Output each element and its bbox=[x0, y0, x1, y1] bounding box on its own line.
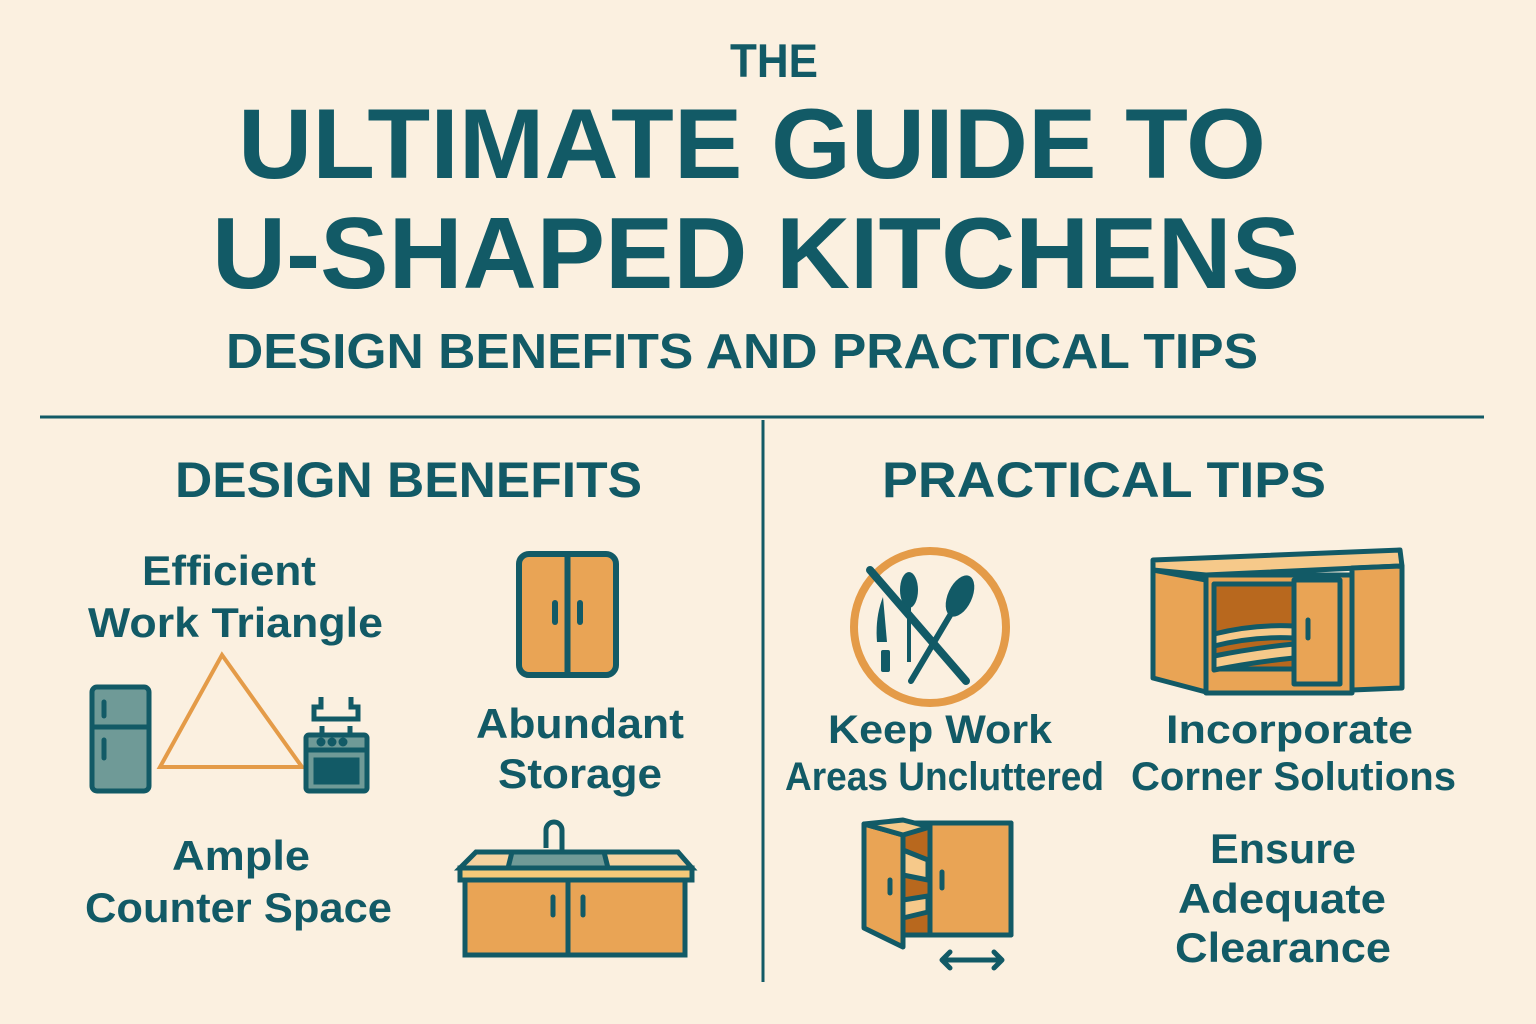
icon: storage cabinet bbox=[519, 554, 616, 675]
text: efficient work triangle: Work Triangle bbox=[88, 599, 383, 646]
text: abundant storage: Storage bbox=[498, 750, 662, 797]
heading: practical tips: PRACTICAL TIPS bbox=[882, 452, 1326, 508]
text: abundant storage: Abundant bbox=[476, 700, 684, 747]
text: abundant storage bbox=[476, 700, 684, 797]
text: ensure adequate clearance: Ensure bbox=[1210, 825, 1356, 872]
icon: triangle bbox=[160, 655, 302, 767]
panel: practical tips bbox=[785, 452, 1456, 971]
text: incorporate corner solutions: Incorporate bbox=[1166, 708, 1413, 752]
text: ample counter space: Counter Space bbox=[85, 884, 392, 931]
text: incorporate corner solutions: Corner Solutions bbox=[1131, 755, 1456, 799]
text: efficient work triangle bbox=[88, 547, 383, 646]
icon: stove bbox=[306, 697, 367, 791]
title bbox=[212, 34, 1300, 310]
text: ensure adequate clearance: Adequate bbox=[1178, 875, 1386, 922]
icon: no clutter bbox=[854, 551, 1006, 703]
text: keep work areas uncluttered bbox=[785, 708, 1104, 799]
text: keep work areas uncluttered: Areas Uncluttered bbox=[785, 755, 1104, 799]
text: ensure adequate clearance: Clearance bbox=[1175, 924, 1391, 971]
text: ample counter space bbox=[85, 832, 392, 931]
icon: fridge bbox=[92, 687, 149, 791]
text: ample counter space: Ample bbox=[172, 832, 310, 879]
text: efficient work triangle: Efficient bbox=[142, 547, 316, 594]
heading: design benefits: DESIGN BENEFITS bbox=[175, 452, 642, 508]
subtitle: DESIGN BENEFITS AND PRACTICAL TIPS bbox=[226, 325, 1258, 379]
text: keep work areas uncluttered: Keep Work bbox=[828, 708, 1053, 752]
icon: corner cabinet bbox=[1153, 550, 1402, 693]
text: ensure adequate clearance bbox=[1175, 825, 1391, 971]
icon: sink counter bbox=[460, 822, 692, 955]
text: incorporate corner solutions bbox=[1131, 708, 1456, 799]
title: U-SHAPED KITCHENS bbox=[212, 198, 1300, 310]
panel: design benefits bbox=[85, 452, 692, 955]
title: ULTIMATE GUIDE TO bbox=[238, 88, 1266, 199]
icon: open cabinet clearance bbox=[864, 820, 1011, 968]
title: THE bbox=[730, 34, 818, 87]
